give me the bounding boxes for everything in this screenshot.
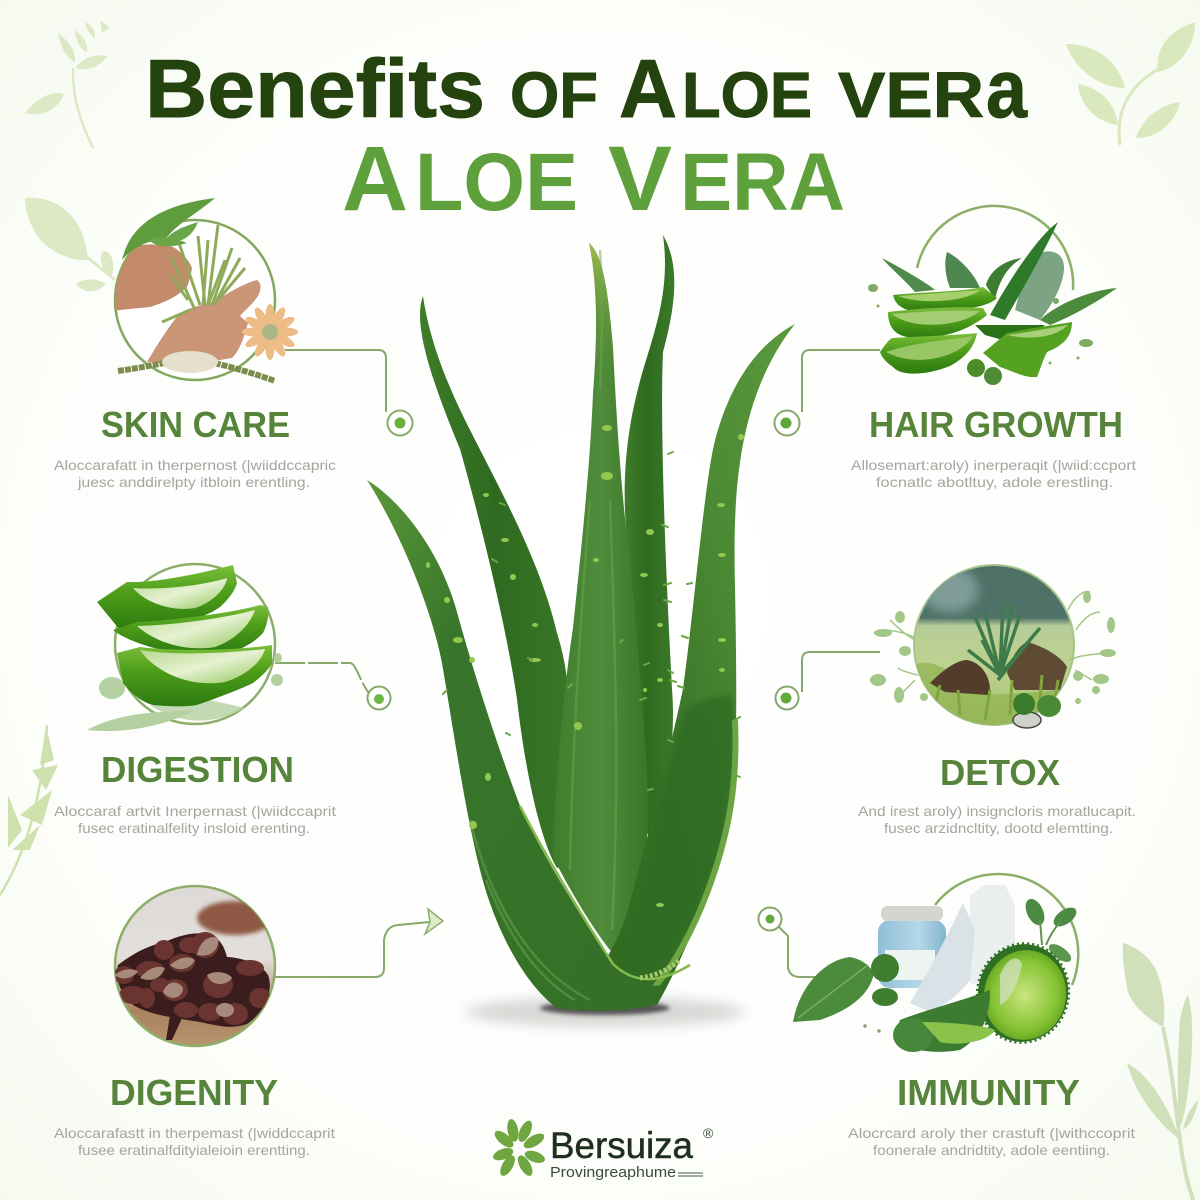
- ground shadow: [465, 997, 745, 1027]
- title: OF: [510, 59, 598, 131]
- arrow head: digenity connector: [425, 909, 443, 934]
- connector lines: [275, 350, 880, 977]
- logo mark: [491, 1118, 547, 1178]
- heading: HAIR GROWTH: [869, 404, 1123, 445]
- description: Aloccarafastt in therpemast (|widdccaprit: [54, 1125, 335, 1141]
- panel: hair growth: [851, 206, 1136, 490]
- description: [54, 1125, 335, 1158]
- heading: SKIN CARE: [101, 404, 290, 445]
- registered mark: ®: [703, 1125, 714, 1141]
- logo tagline: Provingreaphume: [550, 1165, 676, 1181]
- leaf highlights: [470, 250, 616, 1000]
- illustration: aloe cuts: [868, 206, 1117, 385]
- decorative leaf: upper left: [25, 198, 115, 292]
- title: LOE: [682, 59, 812, 131]
- center leaf: [553, 243, 648, 954]
- connector node: detox: [776, 686, 798, 710]
- illustration: dried seeds: [114, 886, 275, 1046]
- decorative sprig: lower right: [1123, 943, 1198, 1200]
- illustration: aloe slices: [87, 564, 283, 731]
- back right leaf: [625, 235, 674, 837]
- heading: IMMUNITY: [897, 1072, 1080, 1113]
- logo tagline rule: [678, 1173, 703, 1176]
- title: Benefits: [145, 42, 485, 135]
- heading: DIGESTION: [101, 749, 294, 790]
- description: juesc anddirelpty itbloin erentling.: [77, 474, 310, 490]
- description: And irest aroly) insigncloris moratlucapit.: [858, 803, 1136, 819]
- front left leaf: [367, 480, 665, 1011]
- subtitle: [342, 128, 845, 230]
- logo name: Bersuiza: [550, 1125, 693, 1166]
- title: [145, 42, 1028, 135]
- illustration: jars, lime and leaves: [793, 874, 1080, 1052]
- description: focnatlc abotltuy, adole erestling.: [876, 474, 1113, 490]
- right leaf lime rim: [652, 720, 735, 990]
- description: Alocrcard aroly ther crastuft (|withccoprit: [848, 1125, 1135, 1141]
- panel: digenity: [54, 886, 335, 1158]
- title: a: [986, 42, 1028, 135]
- panel: detox: [858, 565, 1136, 836]
- heading: DETOX: [940, 752, 1060, 793]
- connector node: skin care: [388, 410, 412, 436]
- subtitle: LOE: [415, 137, 578, 228]
- subtitle: V: [608, 128, 672, 230]
- description: [851, 457, 1136, 490]
- description: Aloccaraf artvit Inerpernast (|wiidccaprit: [54, 803, 336, 819]
- connector node: hair growth: [774, 410, 800, 436]
- logo: [491, 1118, 714, 1181]
- description: Aloccarafatt in therpernost (|wiiddccapric: [54, 457, 336, 473]
- panel: immunity: [793, 874, 1135, 1158]
- decorative sprig: top left: [25, 20, 110, 148]
- subtitle: A: [342, 128, 408, 230]
- description: foonerale andridtity, adole eentiing.: [873, 1142, 1110, 1158]
- connector node: digestion: [368, 686, 390, 710]
- front left leaf lime rim: [520, 806, 690, 979]
- description: fusec arzidncltity, dootd elemtting.: [884, 820, 1113, 836]
- description: fusee eratinalfdityialeioin erentting.: [78, 1142, 310, 1158]
- heading: DIGENITY: [110, 1072, 278, 1113]
- description: Allosemart:aroly) inerperaqit (|wiid:ccport: [851, 457, 1136, 473]
- right front leaf: [605, 324, 795, 1005]
- side thorns: [443, 452, 740, 790]
- center leaf pale tip: [589, 243, 614, 375]
- decorative sprig: lower left: [0, 725, 58, 895]
- right leaf inner dark patch: [632, 695, 734, 975]
- decorative sprig: top right: [1066, 22, 1195, 145]
- panel: skin care: [54, 198, 336, 490]
- illustration: hands with herbs: [110, 198, 298, 381]
- back left leaf: [420, 296, 585, 868]
- title: VER: [838, 59, 984, 131]
- subtitle: ERA: [680, 137, 845, 228]
- illustration: soil and sprout: [870, 565, 1116, 730]
- description: [858, 803, 1136, 836]
- title: A: [619, 42, 677, 135]
- central aloe vera plant: [367, 235, 795, 1027]
- panel: digestion: [54, 564, 336, 836]
- description: [54, 803, 336, 836]
- description: fusec eratinalfelity insloid erenting.: [78, 820, 310, 836]
- description: [54, 457, 336, 490]
- spines: [426, 425, 744, 907]
- description: [848, 1125, 1135, 1158]
- connector node: immunity: [758, 908, 782, 930]
- lime serrated base: [640, 960, 680, 978]
